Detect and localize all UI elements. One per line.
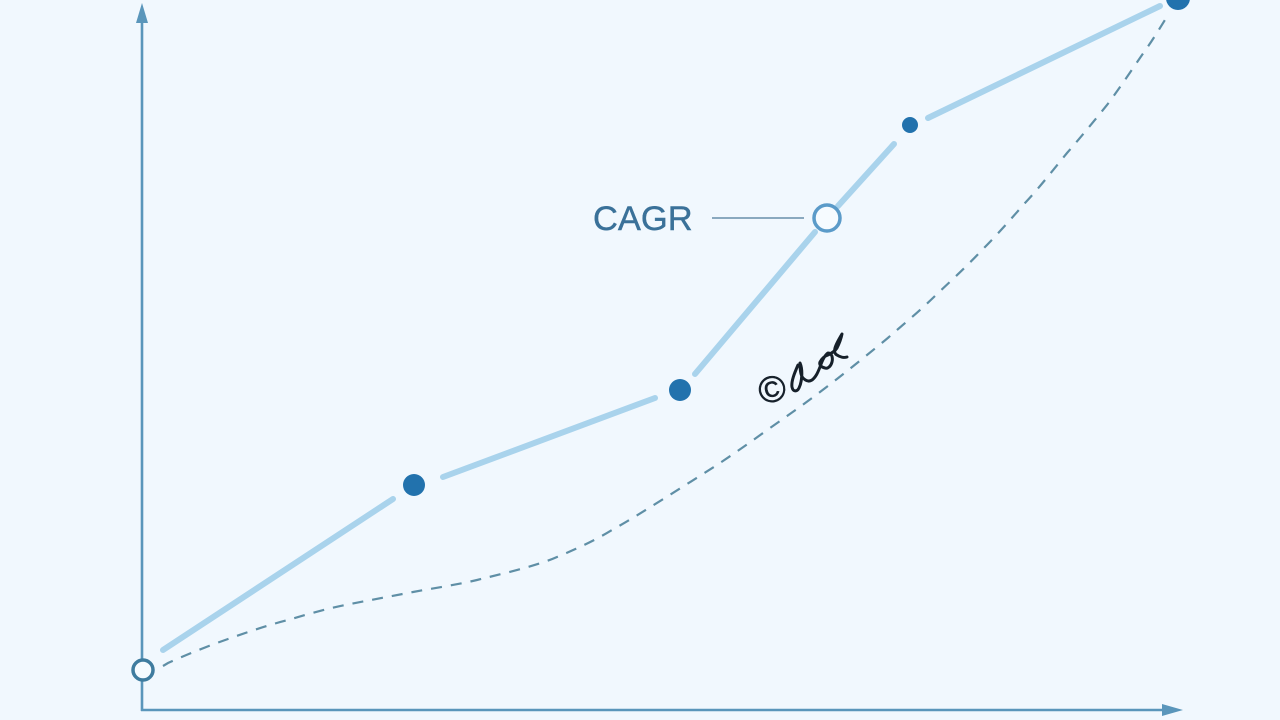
copyright symbol: © — [755, 367, 790, 412]
CAGR marker — [814, 205, 840, 231]
y axis with arrow — [136, 3, 148, 711]
CAGR label: CAGR — [593, 200, 693, 238]
origin marker — [133, 660, 153, 680]
CAGR leader line — [712, 217, 804, 219]
dashed comparison curve — [163, 15, 1168, 666]
x axis with arrow — [141, 704, 1183, 716]
copyright signature mark — [755, 334, 847, 412]
data point 2 — [669, 379, 691, 401]
data point 3 — [902, 117, 918, 133]
signature scribble — [792, 334, 847, 391]
data point 4 — [1166, 0, 1190, 10]
growth line segments — [163, 6, 1160, 650]
data point 1 — [403, 474, 425, 496]
